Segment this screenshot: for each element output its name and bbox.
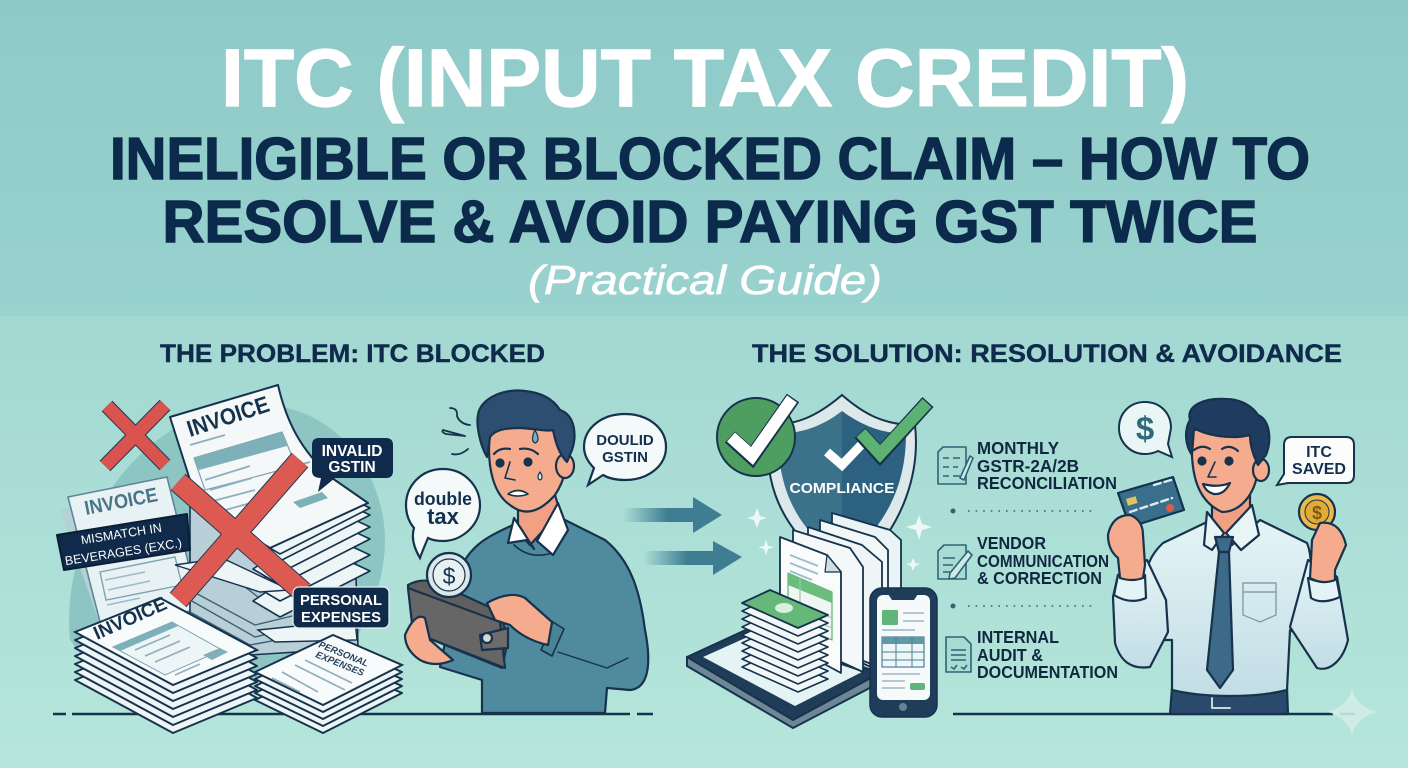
shirt pocket [1243,583,1276,622]
left hand [405,617,453,664]
tablet [687,628,885,728]
background: header band [0,0,1408,316]
trousers [1170,688,1288,714]
person: worried man [405,390,648,713]
check: green tick [860,402,928,455]
speech bubble: DOULID GSTIN: DOULID [596,432,654,449]
item: monthly reconciliation: MONTHLY [977,438,1059,458]
speech bubble: ITC saved: ITC [1306,444,1332,461]
subtitle line 1: INELIGIBLE OR BLOCKED CLAIM – HOW TO [110,126,1310,192]
icon: internal audit [946,637,971,672]
item: monthly reconciliation: RECONCILIATION [977,473,1117,493]
tie [1207,537,1233,688]
speech bubble: double tax: double [414,489,472,509]
speech bubble: dollar: $ [1136,410,1154,447]
heading: the solution: THE SOLUTION: RESOLUTION & AVOIDANCE [752,340,1342,368]
crew neckline [514,545,552,555]
teal blob behind invoices [69,404,385,680]
label: mismatch in beverages [57,514,190,570]
invoice stack: personal expenses [255,635,402,733]
invoice: top page: INVOICE [184,391,272,442]
invoice: central stack [175,488,370,655]
shield check [827,443,863,465]
panel: solution illustration [687,395,937,728]
cross: small [105,405,165,466]
sparkles [747,508,932,571]
item: monthly reconciliation [977,438,1117,493]
invoice stack: bottom left: INVOICE [90,594,170,645]
icon: vendor communication [938,545,972,579]
icon: sparkle watermark [1328,688,1376,736]
face [1192,425,1258,512]
ground line right [953,713,1355,715]
arrow: upper [623,497,722,533]
coin [427,553,471,597]
smile [1203,483,1230,494]
sweat drops [532,430,542,480]
speech bubble: ITC saved [1277,437,1354,485]
shirt body [1147,520,1311,696]
item: internal audit: AUDIT & [977,645,1043,665]
item: monthly reconciliation: GSTR-2A/2B [977,456,1079,476]
neck [518,495,560,545]
invoice stack: personal expenses: EXPENSES [314,650,366,679]
gold coin: $ [1312,503,1322,523]
wallet [408,581,508,668]
left cuff [1114,575,1146,601]
invoice: top page [170,385,368,548]
phone [870,588,937,717]
subtitle line 2: RESOLVE & AVOID PAYING GST TWICE [162,189,1258,255]
invoice stack: personal expenses: PERSONAL [317,640,370,670]
item: vendor communication: VENDOR [977,533,1046,553]
collar [1204,505,1259,550]
item: vendor communication: COMMUNICATION [977,551,1109,571]
invoice: back left page: INVOICE [83,484,160,520]
background: illustration area [0,316,1408,768]
money stack [742,590,828,692]
left hand [1108,515,1145,580]
right cuff [1308,576,1340,601]
speech bubble: double tax [406,469,480,558]
hair [477,390,574,462]
heading: the problem: THE PROBLEM: ITC BLOCKED [160,340,545,368]
speech bubble: DOULID GSTIN: GSTIN [602,449,648,466]
icon: reconciliation checklist [938,447,973,484]
right arm [1290,560,1348,669]
badge: green check circle [717,398,795,476]
label: invalid GSTIN [312,438,393,492]
ear [1253,459,1269,481]
shield: COMPLIANCE [790,480,894,497]
belt buckle [1212,698,1230,708]
wallet front [408,588,505,668]
shield [767,395,916,565]
wallet clasp [480,628,508,650]
documents stack [780,513,901,680]
label: invalid GSTIN: INVALID [322,443,382,460]
separator dots 1 [950,508,1097,514]
nose and mouth [505,462,528,496]
practical guide tagline: (Practical Guide) [528,257,882,303]
face [489,425,567,512]
person: happy man [1108,399,1348,714]
gold coin [1299,494,1335,530]
label: invalid GSTIN: GSTIN [328,459,376,476]
shirt collar [508,503,568,555]
speech bubble: dollar [1119,402,1172,457]
right hand [487,595,552,645]
label: personal expenses: PERSONAL [300,592,382,609]
panel: problem invoices [57,385,402,733]
label: mismatch in beverages: MISMATCH IN [80,521,163,547]
item: internal audit [977,627,1118,682]
invoice stack: bottom left [75,594,257,733]
item: vendor communication: & CORRECTION [977,568,1102,588]
separator dots 2 [950,604,1097,608]
cross: large [178,460,303,600]
eyes and brows [494,449,538,466]
speech bubble: DOULID GSTIN [584,414,666,485]
speech bubble: double tax: tax [427,504,460,529]
label: personal expenses: EXPENSES [301,609,381,626]
hair [1186,399,1269,465]
eyes and brows [1194,447,1238,464]
item: internal audit: DOCUMENTATION [977,662,1118,682]
title: ITC (INPUT TAX CREDIT) [221,33,1189,124]
ground line left [53,713,653,715]
sweater [440,520,648,713]
item: vendor communication [977,533,1109,588]
item: internal audit: INTERNAL [977,627,1059,647]
ear [556,454,574,478]
right hand [1310,523,1346,582]
panel: solution list [938,438,1118,682]
left arm [1113,560,1168,668]
arrow: lower [643,541,742,575]
credit card [1118,477,1184,527]
speech bubble: ITC saved: SAVED [1292,461,1346,478]
label: personal expenses [293,587,389,628]
label: mismatch in beverages: BEVERAGES (EXC.) [64,536,183,568]
stress marks [442,408,470,454]
coin: $ [443,563,456,589]
nose [1208,462,1216,477]
invoice: back left page [60,477,200,625]
neck [1212,495,1250,540]
sweater cuff and arm fold [541,622,628,668]
